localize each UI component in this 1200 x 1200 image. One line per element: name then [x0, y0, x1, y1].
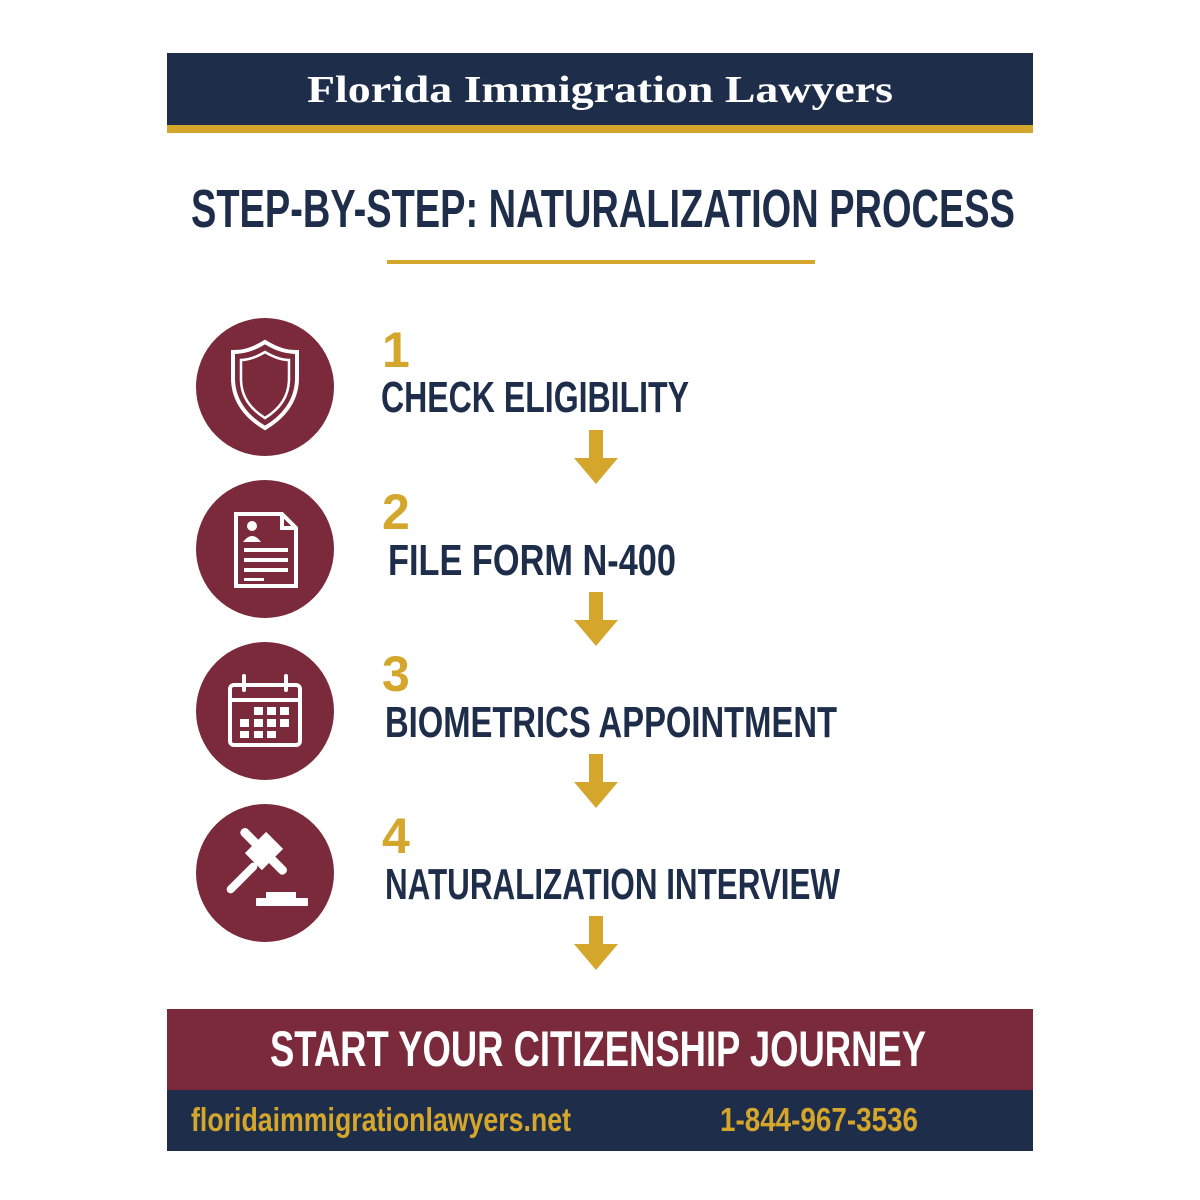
- step 4: NATURALIZATION INTERVIEW: [385, 860, 840, 909]
- step 4: [196, 804, 840, 942]
- header bar: Florida Immigration Lawyers: [307, 69, 893, 111]
- arrow 2: [574, 592, 618, 646]
- step 3: [196, 642, 837, 780]
- icon: gavel: [225, 826, 308, 906]
- gold divider under title: [387, 260, 815, 264]
- arrow 4: [574, 916, 618, 970]
- step 2: [196, 480, 676, 618]
- step 4: 4: [382, 808, 410, 864]
- step 3: BIOMETRICS APPOINTMENT: [385, 698, 837, 747]
- header bar: [167, 53, 1033, 133]
- footer contact bar: floridaimmigrationlawyers.net: [191, 1101, 571, 1138]
- cta banner: [167, 1009, 1033, 1090]
- arrow 1: [574, 430, 618, 484]
- step 3: 3: [382, 646, 410, 702]
- step 2: 2: [382, 484, 410, 540]
- step 2: FILE FORM N-400: [388, 536, 676, 585]
- icon: calendar: [230, 676, 300, 745]
- footer contact bar: 1-844-967-3536: [720, 1101, 918, 1138]
- arrow 3: [574, 754, 618, 808]
- footer contact bar: [167, 1090, 1033, 1151]
- step 1: 1: [382, 322, 410, 378]
- icon: document: [236, 514, 296, 586]
- step 1: [196, 318, 689, 456]
- cta banner: START YOUR CITIZENSHIP JOURNEY: [270, 1021, 926, 1077]
- icon: shield: [233, 342, 297, 428]
- step 1: CHECK ELIGIBILITY: [381, 373, 689, 422]
